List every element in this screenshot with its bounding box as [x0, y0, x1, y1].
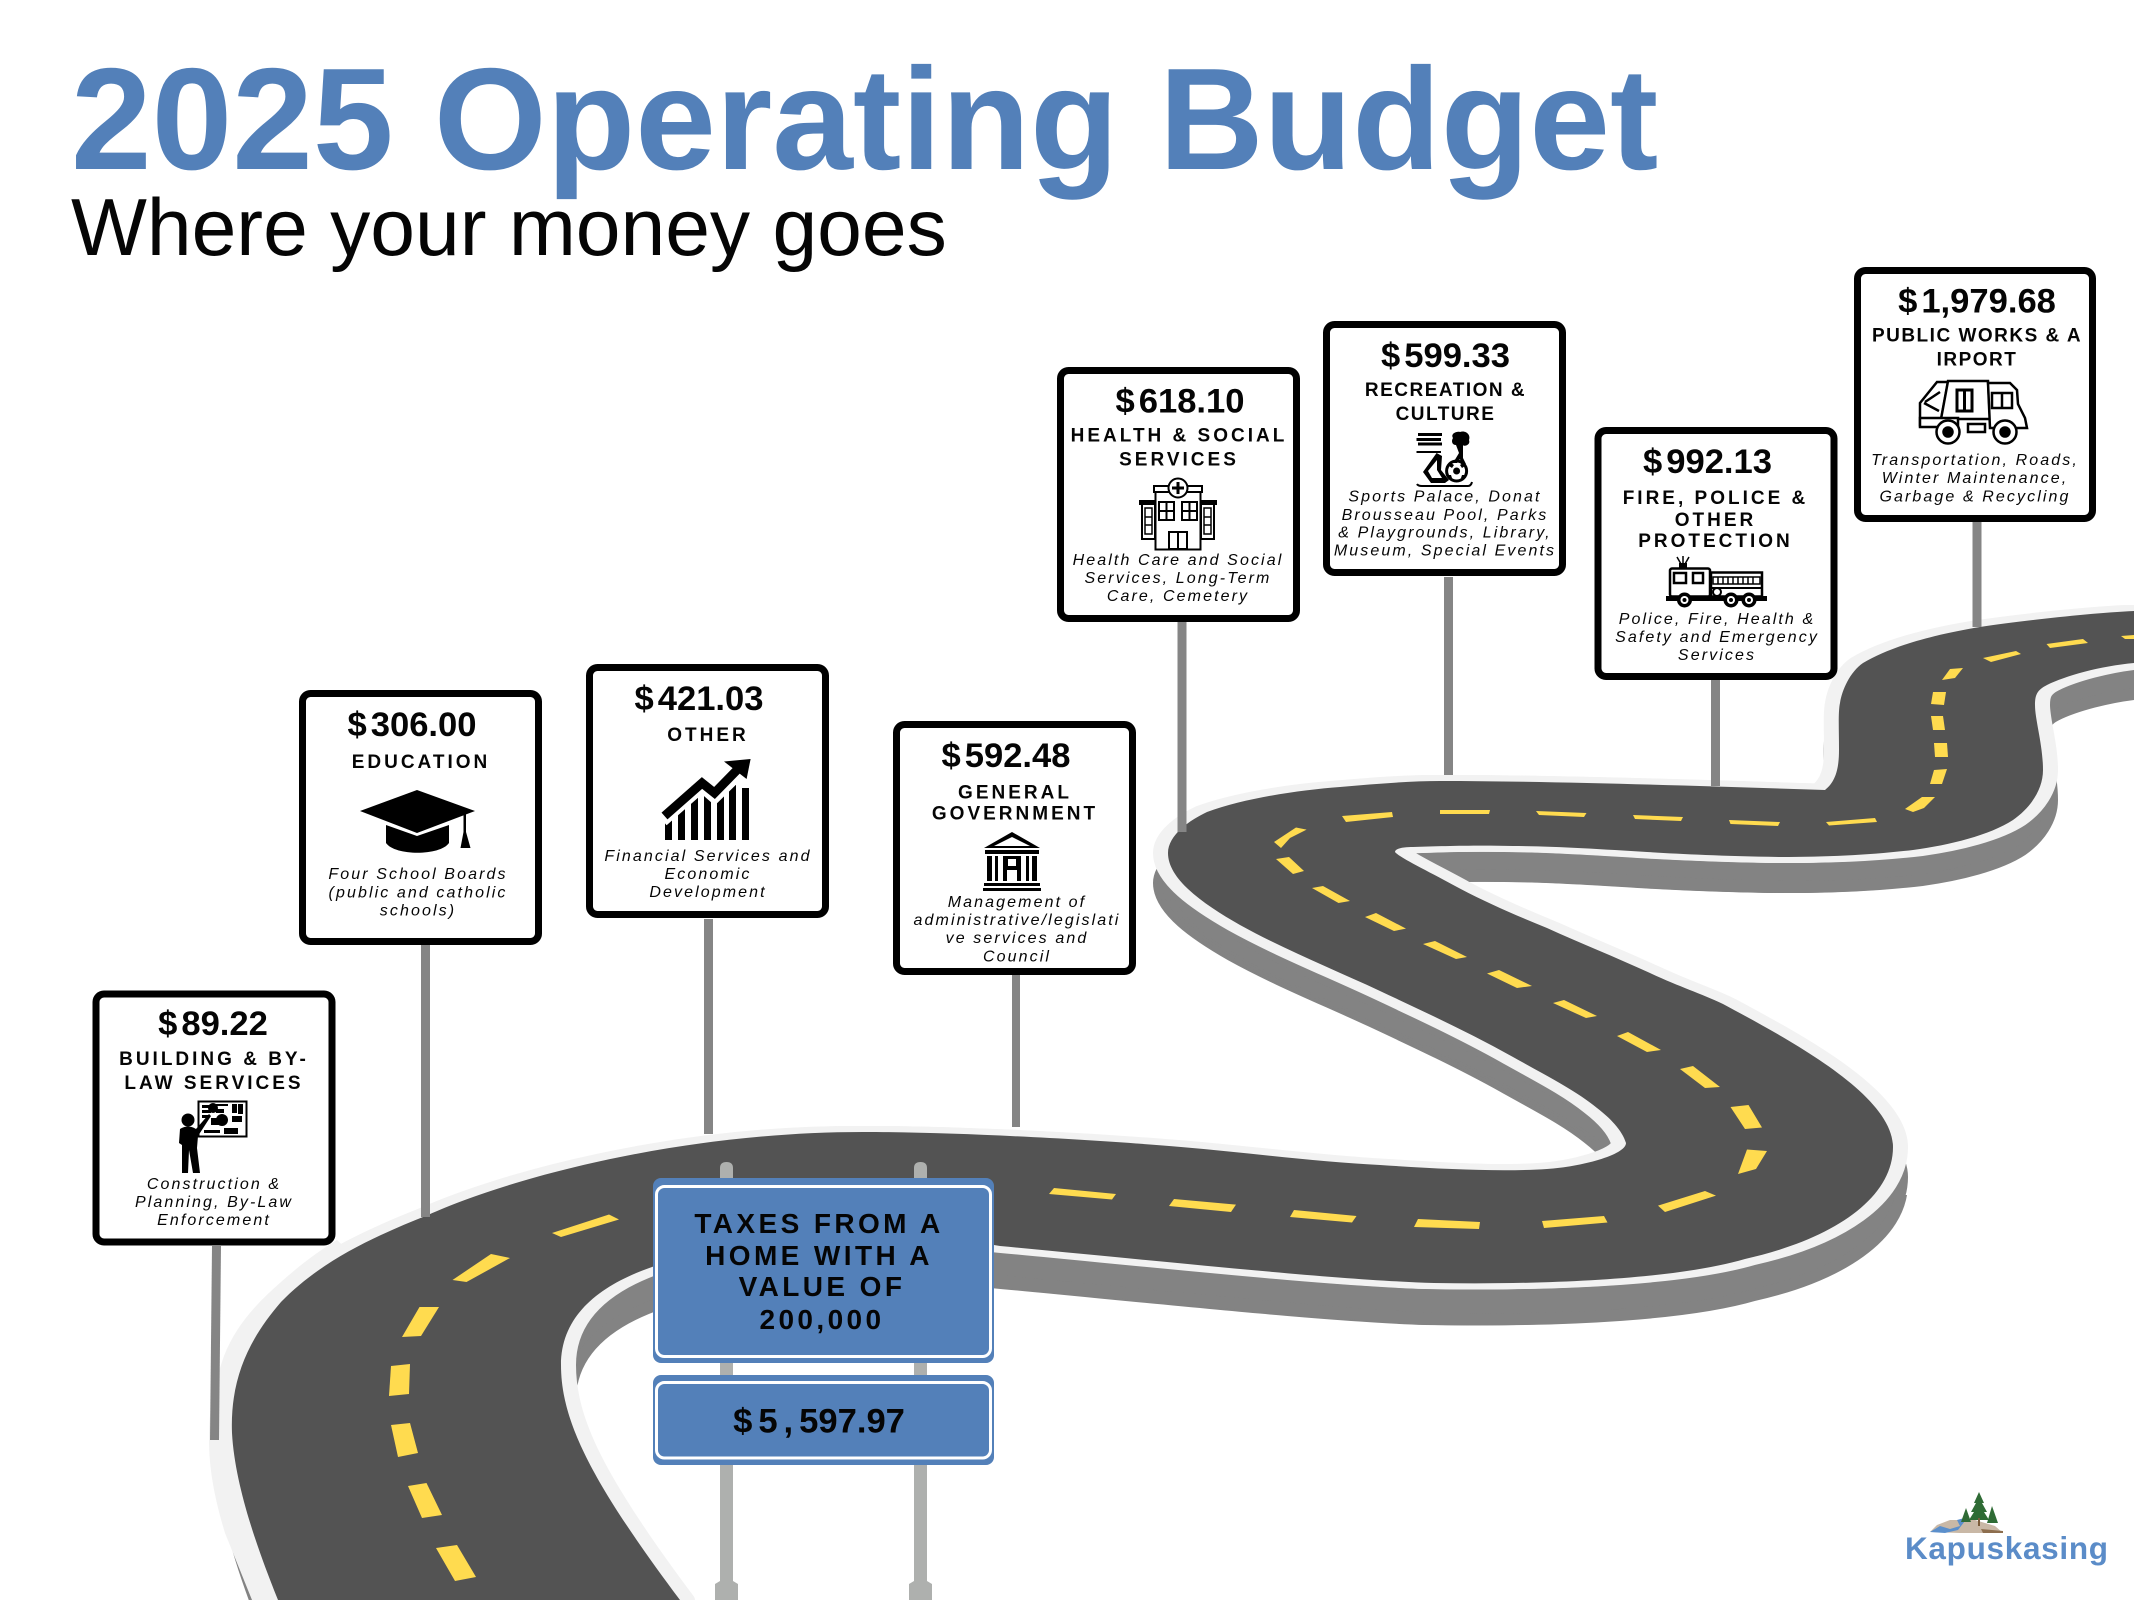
upper panel: TAXES FROM A [694, 1208, 944, 1239]
sign board [1858, 270, 2092, 518]
logo trees [1961, 1492, 1998, 1523]
description: (public and catholic [329, 884, 507, 902]
upper panel [653, 1178, 994, 1363]
amount: $992.13 [1643, 443, 1772, 481]
winding road [209, 611, 2134, 1600]
signpost: health and social services [1060, 370, 1296, 832]
category: OTHER [667, 725, 749, 746]
category [1872, 326, 2082, 370]
description: Enforcement [157, 1212, 271, 1229]
sign board [302, 694, 538, 942]
category: SERVICES [1119, 450, 1239, 470]
sign board [896, 724, 1132, 972]
description [914, 894, 1120, 966]
pole [1711, 680, 1720, 786]
description [1615, 611, 1819, 664]
category: IRPORT [1937, 350, 2017, 370]
category: BUILDING & BY- [119, 1049, 309, 1070]
pole [1444, 577, 1453, 775]
description [328, 866, 508, 920]
icon: rising chart [662, 759, 751, 840]
yellow centre line [389, 635, 2134, 1581]
signpost: public works and airport [1858, 270, 2092, 627]
description: ve services and [946, 930, 1088, 947]
logo: Kapuskasing [1905, 1492, 2108, 1566]
category [119, 1049, 309, 1094]
icon: fire truck [1666, 556, 1767, 608]
icon: recreation [1416, 432, 1472, 486]
asphalt [232, 611, 2134, 1600]
pole [704, 919, 713, 1134]
category: GOVERNMENT [932, 804, 1098, 824]
signpost: building and by-law services [96, 994, 332, 1440]
pole [421, 944, 430, 1217]
upper panel: HOME WITH A [705, 1240, 933, 1271]
amount: $618.10 [1116, 382, 1244, 420]
wide shoulder at lower left [209, 1240, 400, 1600]
description: Management of [948, 894, 1086, 911]
category: PUBLIC WORKS & A [1872, 326, 2082, 346]
highway sign: taxes total [653, 1162, 994, 1600]
icon: garbage truck [1920, 381, 2027, 444]
logo wordmark: Kapuskasing [1905, 1530, 2108, 1566]
pole [1178, 622, 1186, 832]
description: Winter Maintenance, [1882, 470, 2068, 487]
category [1365, 380, 1526, 425]
description: Police, Fire, Health & [1619, 611, 1815, 628]
sign board [96, 994, 332, 1242]
pole [210, 1246, 221, 1440]
description [135, 1176, 293, 1229]
upper panel: VALUE OF [739, 1271, 905, 1302]
description: Safety and Emergency [1615, 629, 1819, 646]
amount: $89.22 [158, 1005, 268, 1043]
description: Services, Long-Term [1085, 570, 1271, 587]
lower panel: $5,597.97 [733, 1402, 905, 1440]
icon: hospital [1140, 478, 1216, 550]
category: HEALTH & SOCIAL [1071, 426, 1287, 446]
description: administrative/legislati [914, 912, 1120, 929]
pole [1972, 521, 1982, 627]
pole [1012, 974, 1020, 1127]
icon: government building [983, 832, 1041, 891]
category: EDUCATION [352, 752, 490, 773]
signpost: other [590, 668, 826, 1134]
description: Brousseau Pool, Parks [1342, 507, 1548, 524]
description [1334, 488, 1556, 560]
category: RECREATION & [1365, 380, 1526, 401]
logo island [1930, 1520, 2003, 1533]
road shadow [223, 641, 2134, 1600]
description: Financial Services and [604, 848, 812, 865]
lower panel [653, 1375, 994, 1465]
description [1073, 552, 1283, 605]
category [932, 782, 1098, 824]
icon: graduation cap [360, 790, 475, 853]
category: CULTURE [1396, 404, 1495, 425]
category: LAW SERVICES [124, 1073, 304, 1094]
description: Transportation, Roads, [1871, 452, 2079, 469]
description: & Playgrounds, Library, [1338, 524, 1552, 542]
left post [715, 1162, 738, 1600]
signpost: general government [896, 724, 1132, 1127]
right post [909, 1162, 932, 1600]
description: Economic [664, 866, 752, 883]
description: Council [983, 948, 1051, 966]
description: schools) [380, 902, 456, 920]
description: Planning, By-Law [135, 1194, 293, 1211]
description: Development [649, 884, 767, 901]
description: Garbage & Recycling [1879, 488, 2071, 506]
amount: $1,979.68 [1898, 282, 2056, 320]
category: OTHER [1675, 510, 1756, 531]
sign board [590, 668, 826, 914]
description: Sports Palace, Donat [1348, 488, 1542, 506]
description: Four School Boards [328, 866, 508, 883]
sign board [1326, 324, 1562, 572]
sign board [1060, 370, 1296, 618]
upper panel: 200,000 [759, 1304, 885, 1335]
road shoulder [223, 611, 2134, 1600]
description: Health Care and Social [1073, 552, 1283, 569]
category: PROTECTION [1638, 531, 1793, 552]
sign board [1598, 430, 1834, 676]
icon: presenter at board [179, 1102, 246, 1173]
category: GENERAL [958, 782, 1072, 804]
subtitle: Where your money goes [71, 183, 947, 273]
amount: $592.48 [942, 737, 1070, 775]
title: 2025 Operating Budget [71, 38, 1658, 200]
description: Care, Cemetery [1107, 588, 1249, 605]
category [1071, 426, 1287, 470]
description: Museum, Special Events [1334, 542, 1556, 560]
signpost: recreation and culture [1326, 324, 1562, 775]
amount: $599.33 [1381, 337, 1510, 375]
category: FIRE, POLICE & [1623, 488, 1808, 509]
description: Services [1678, 647, 1756, 664]
amount: $306.00 [348, 706, 476, 744]
amount: $421.03 [634, 680, 764, 718]
signpost: education [302, 694, 538, 1217]
signpost: fire, police and other protection [1598, 430, 1834, 786]
description: Construction & [147, 1176, 281, 1193]
description [1871, 452, 2079, 506]
description [604, 848, 812, 901]
category [1623, 488, 1808, 552]
